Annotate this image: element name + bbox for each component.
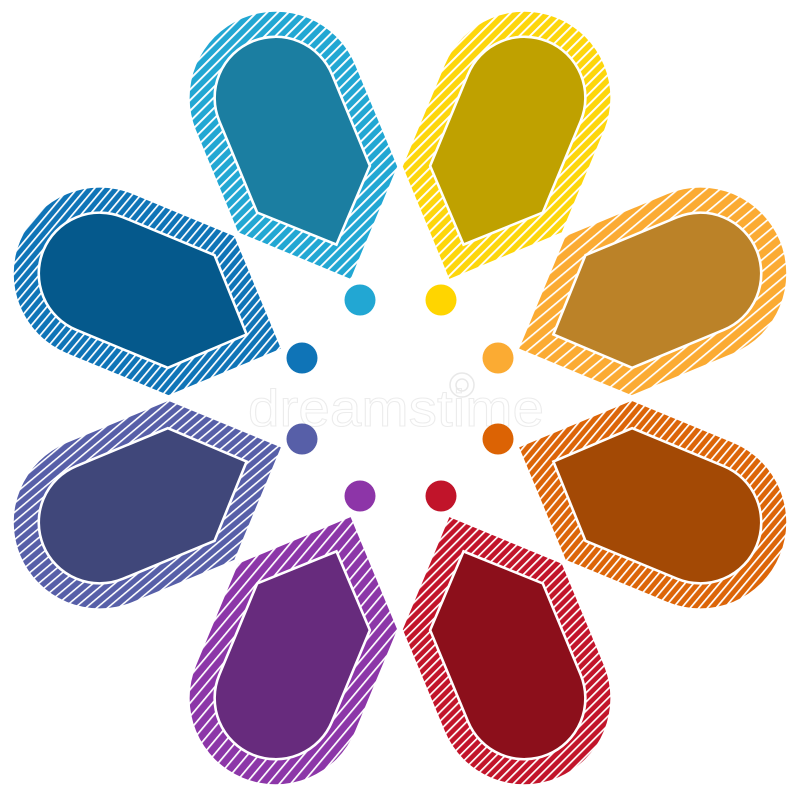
petal: light orange: [486, 161, 800, 428]
petal: indigo: [0, 368, 314, 635]
dot: indigo: [286, 424, 318, 454]
petal: orange: [486, 368, 800, 635]
petal: red: [370, 484, 637, 800]
dot: red: [426, 480, 456, 512]
petal: teal: [163, 0, 430, 312]
petal: yellow: [370, 0, 637, 312]
petal: blue: [0, 161, 314, 428]
petal: purple: [163, 484, 430, 800]
dot: blue: [286, 342, 318, 374]
watermark: dreamstime: [248, 380, 544, 438]
dot: orange: [482, 424, 514, 454]
dot: purple: [344, 480, 376, 512]
dot: teal: [344, 284, 376, 316]
dot: yellow: [426, 284, 456, 316]
dot: light orange: [482, 342, 514, 374]
